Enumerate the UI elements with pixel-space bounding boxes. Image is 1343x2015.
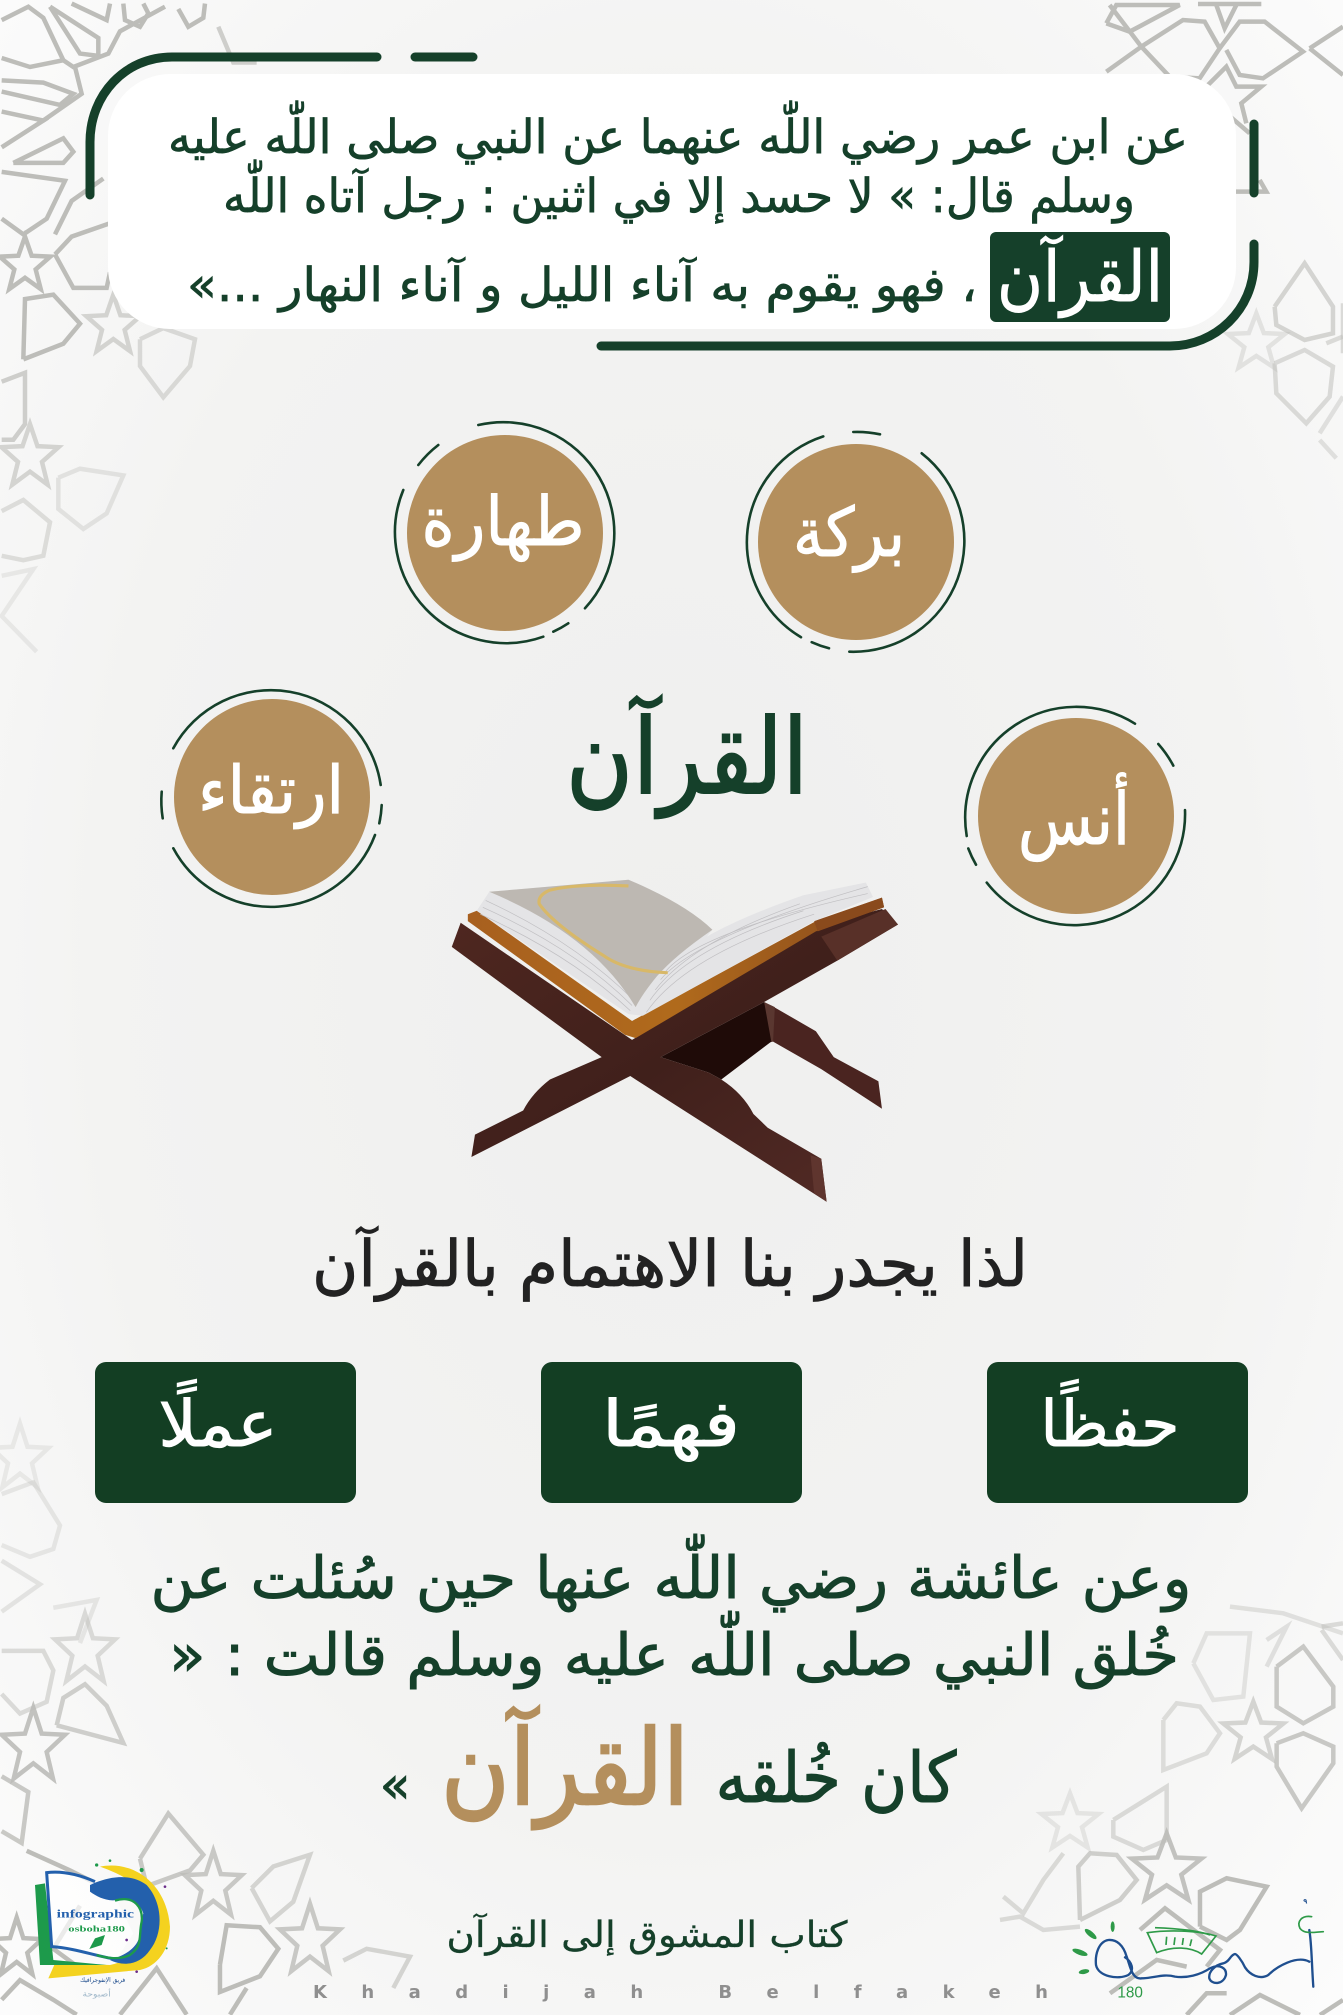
hadith line 2: وسلم قال: » لا حسد إلا في اثنين : رجل آتاه اللّٰه: [223, 160, 1135, 224]
highlight: Quran: القرآن: [997, 235, 1163, 318]
circle: baraka: [747, 432, 964, 652]
circle: tahara: طهارة: [422, 483, 584, 562]
button: hifz: [987, 1362, 1248, 1503]
logo green wave: [97, 1899, 142, 1958]
card frame: right dash: [1250, 124, 1258, 193]
page lines: [480, 887, 868, 1012]
circle: baraka: بركة: [793, 494, 905, 573]
button: hifz: حفظًا: [1040, 1379, 1180, 1462]
subheading: لذا يجدر بنا الاهتمام بالقرآن: [312, 1225, 1028, 1302]
book cover: [468, 898, 884, 1038]
logo green hamza: [1299, 1916, 1323, 1932]
stand: main planks: [452, 909, 898, 1202]
logo open book: [1147, 1928, 1216, 1954]
logo: osboha 180: [1072, 1897, 1323, 2001]
logo: infographic team: [35, 1859, 170, 1999]
logo small brand: أصبوحة: [82, 1989, 111, 1999]
button: fahm: [541, 1362, 802, 1503]
circle: uns: [965, 707, 1185, 925]
Aisha line 3: كان خُلقه: [716, 1737, 957, 1819]
stand: leg edge: [811, 1155, 827, 1202]
logo top mark: ٩: [1303, 1897, 1307, 1905]
logo title: infographic: [57, 1906, 135, 1920]
hadith card: [108, 74, 1236, 329]
stand: back legs: [771, 1005, 882, 1109]
Aisha line 2: خُلق النبي صلى اللّٰه عليه وسلم قالت : «: [169, 1610, 1179, 1690]
Aisha line 1: وعن عائشة رضي اللّٰه عنها حين سُئلت عن: [150, 1533, 1192, 1613]
logo dots: [95, 1859, 168, 1973]
logo page: [47, 1872, 133, 1959]
card frame: bottom right bracket: [601, 244, 1254, 346]
open page: [489, 880, 712, 1007]
hadith line 1: عن ابن عمر رضي اللّٰه عنهما عن النبي صلى اللّٰه عليه: [168, 101, 1188, 165]
logo blue wave: [90, 1877, 160, 1964]
title: القرآن: [566, 695, 808, 819]
author credit: Khadijah Belfakeh: [313, 1982, 1048, 2003]
background pattern: top left: [0, 4, 257, 652]
stand: right end face: [821, 909, 898, 961]
circle: tahara: [395, 422, 614, 643]
card frame: top left bracket: [90, 57, 377, 195]
stand: shadow: [661, 1002, 771, 1080]
button: amal: [95, 1362, 356, 1503]
logo team name: فريق الإنفوجرافيك: [80, 1977, 125, 1984]
circle: irtiqaa: ارتقاء: [198, 752, 344, 829]
circle: uns: أنس: [1018, 772, 1130, 861]
page ornament: [539, 885, 668, 973]
logo number: 180: [1117, 1984, 1143, 2001]
stand: connector: [757, 1002, 775, 1045]
logo blue page outline: [47, 1872, 120, 1960]
text block: Aisha hadith: [150, 1533, 1192, 1830]
left page block: [477, 880, 712, 1016]
card frame: top dash: [415, 52, 473, 62]
button: amal: عملًا: [158, 1379, 278, 1462]
closing quote: »: [380, 1756, 410, 1814]
right cover: [814, 898, 884, 931]
logo pen nib: [89, 1935, 105, 1949]
logo yellow swoosh: [48, 1866, 170, 1978]
logo leaves: [1072, 1921, 1115, 1975]
logo green back page: [35, 1883, 107, 1965]
hadith line 3: ، فهو يقوم به آناء الليل و آناء النهار ...»: [187, 256, 977, 313]
source: book title: كتاب المشوق إلى القرآن: [446, 1912, 848, 1956]
background pattern: bottom left: [0, 1424, 410, 2015]
background pattern: bottom right: [1000, 1607, 1343, 2015]
logo handle: osboha180: [68, 1925, 125, 1934]
panel: hadith quote: [90, 57, 1254, 346]
circle: irtiqaa: [161, 690, 382, 907]
gold word: القرآن: [441, 1706, 689, 1830]
button: fahm: فهمًا: [602, 1388, 740, 1462]
icon: open Quran on wooden stand: [452, 880, 898, 1202]
background pattern: top right: [1106, 4, 1343, 458]
right page block: [643, 883, 873, 1016]
logo script: [1096, 1930, 1313, 1987]
